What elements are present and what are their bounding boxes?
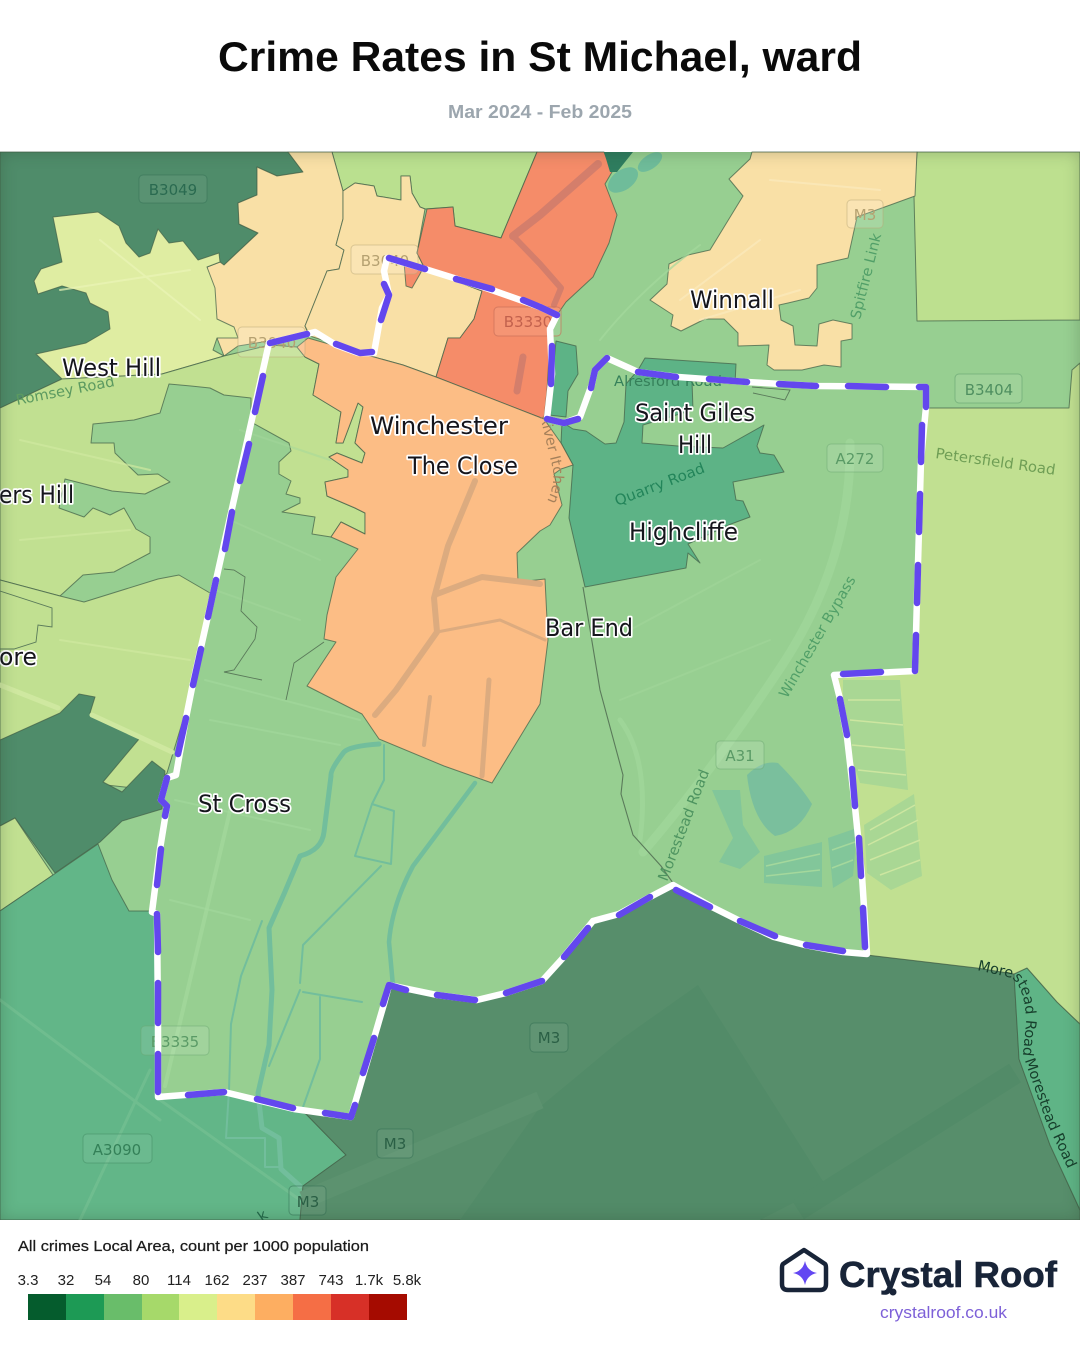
shield: A31: A31 <box>725 747 755 765</box>
place label: The Close: The Close <box>407 452 518 480</box>
legend tick labels: 54 <box>95 1272 111 1289</box>
shield: B3040 west <box>238 327 305 357</box>
legend tick labels: 387 <box>280 1272 306 1289</box>
road network and street grid <box>0 180 880 1220</box>
road label: Morestead Road north: Morestead Road <box>656 768 713 883</box>
white footer panel <box>0 1220 1080 1350</box>
south dark shading <box>303 985 1015 1220</box>
shield: M3 south centre: M3 <box>538 1029 560 1047</box>
area: central cream <box>305 176 482 377</box>
road label: River Itchen: River Itchen <box>540 415 564 502</box>
boundary purple dashes <box>157 258 926 1117</box>
road label: Spitfire Link: Spitfire Link <box>848 231 885 321</box>
icon: house with star <box>782 1250 826 1290</box>
place labels <box>0 286 774 818</box>
shield: B3040 west: B3040 <box>248 334 296 352</box>
shield: B3040 north: B3040 <box>361 252 409 270</box>
shield: M3 south west: M3 <box>384 1135 406 1153</box>
area: orange central Winchester <box>297 338 573 783</box>
road labels <box>15 231 1078 1266</box>
logo: Crystal Roof <box>782 1250 1058 1322</box>
legend tick labels: 743 <box>318 1272 344 1289</box>
area: west lime <box>0 345 365 596</box>
place label: Saint Giles: Saint Giles <box>635 399 755 427</box>
legend tick labels: 3.3 <box>18 1272 38 1289</box>
road label: Winchester Bypass: Winchester Bypass <box>777 573 859 701</box>
place label: Hill: Hill <box>678 431 712 459</box>
area: south dark green <box>300 885 1080 1220</box>
area: south-east green sliver <box>1014 968 1080 1210</box>
legend <box>18 1238 422 1320</box>
legend tick labels: 5.8k <box>393 1272 422 1289</box>
legend colour scale <box>28 1294 407 1320</box>
rivers and water channels <box>226 744 475 1186</box>
area: Stanmore lime <box>0 575 210 790</box>
area: city centre red-orange <box>417 152 617 419</box>
shield: B3335: B3335 <box>151 1033 199 1051</box>
waterworks ponds, beds and north water <box>603 148 922 890</box>
shield: M3 south centre <box>530 1023 568 1052</box>
choropleth areas <box>0 152 1080 1220</box>
shield: M3 south west <box>377 1129 413 1158</box>
wordmark key tail <box>890 1288 896 1296</box>
shield: B3404: B3404 <box>965 381 1013 399</box>
road label: clipped fragment: k <box>255 1207 272 1225</box>
map panel <box>0 152 1080 1225</box>
boundary white line <box>152 258 926 1117</box>
area: riverside green <box>549 341 578 417</box>
map base area <box>0 152 1080 1220</box>
thin sub-area outlines <box>0 387 790 700</box>
shield: B3335 <box>141 1026 209 1055</box>
road label: Romsey Road: Romsey Road <box>15 374 116 409</box>
area: south-west lime <box>0 818 53 911</box>
place label: West Hill: West Hill <box>62 354 161 382</box>
place label: clipped Stanmore: ore <box>0 643 37 671</box>
legend tick labels: 114 <box>167 1272 191 1289</box>
shield: A3090 <box>83 1134 152 1163</box>
map edge vignette <box>0 152 1080 1220</box>
website url: crystalroof.co.uk <box>880 1304 1008 1322</box>
wordmark: Crystal Roof <box>839 1254 1058 1295</box>
legend title: All crimes Local Area, count per 1000 population <box>18 1238 369 1255</box>
area: north-east lime <box>914 152 1080 321</box>
legend tick labels: 80 <box>133 1272 149 1289</box>
road label: Alresford Road: Alresford Road <box>614 374 722 390</box>
shield: M3 bottom: M3 <box>297 1193 319 1211</box>
place label: Winnall: Winnall <box>690 286 774 314</box>
shield: M3 north <box>847 200 883 228</box>
road label: Quarry Road: Quarry Road <box>613 461 707 510</box>
legend tick labels: 1.7k <box>355 1272 384 1289</box>
subtitle: date range: Mar 2024 - Feb 2025 <box>448 101 632 122</box>
title: Crime Rates in St Michael, ward <box>218 33 862 80</box>
area: small red wedge <box>404 262 423 288</box>
road label: Morestead Road south east: Morestead Road Morestead Road <box>978 960 1078 1168</box>
shield: A272: A272 <box>836 450 874 468</box>
shield: B3330: B3330 <box>504 313 552 331</box>
place label: clipped Winnall Hill: ers Hill <box>0 481 74 509</box>
shield: B3049: B3049 <box>149 181 197 199</box>
legend tick labels: 237 <box>242 1272 268 1289</box>
place label: Highcliffe: Highcliffe <box>629 518 738 546</box>
place label: Winchester: Winchester <box>370 412 508 440</box>
shield: B3040 north <box>351 245 418 274</box>
area: south-east lime <box>834 363 1080 1024</box>
shield: B3330 <box>494 307 561 336</box>
shield: A31 <box>716 741 764 769</box>
place label: St Cross: St Cross <box>198 790 291 818</box>
shield: B3404 <box>955 374 1022 403</box>
area: north-west dark green <box>0 152 303 408</box>
ward boundary: St Michael dashed outline <box>152 258 926 1117</box>
area: Winnall cream <box>650 152 917 370</box>
shield: M3 bottom <box>289 1186 326 1215</box>
place label: Bar End: Bar End <box>545 614 633 642</box>
road shields <box>83 175 1022 1215</box>
area: Highcliffe darker green <box>561 358 784 587</box>
area: west dark green <box>0 694 165 873</box>
area: north lime <box>332 152 537 238</box>
area: West Hill yellow-lime <box>34 212 238 379</box>
legend tick labels: 32 <box>58 1272 74 1289</box>
shield: B3049 <box>139 175 207 203</box>
area: station cream <box>207 152 344 356</box>
shield: A272 <box>827 444 883 472</box>
legend tick labels: 162 <box>204 1272 230 1289</box>
road label: Petersfield Road: Petersfield Road <box>934 446 1056 479</box>
area: south-west mid green <box>0 844 346 1220</box>
legend tick labels <box>18 1272 422 1289</box>
central roads in orange and red areas <box>375 164 598 776</box>
ward boundary line between upper areas <box>583 587 673 883</box>
shield: A3090: A3090 <box>93 1141 141 1159</box>
shield: M3 north: M3 <box>854 206 876 224</box>
